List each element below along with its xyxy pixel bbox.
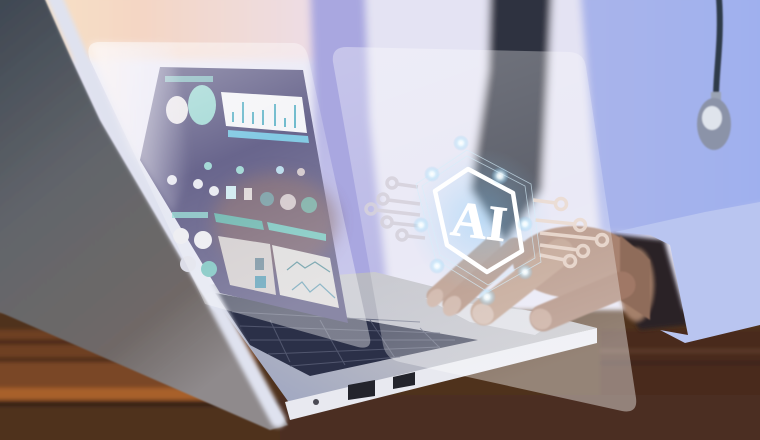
wooden table bbox=[0, 310, 760, 440]
laptop base bbox=[205, 272, 597, 420]
laptop lid back bbox=[0, 0, 288, 430]
right glass panel bbox=[333, 47, 636, 411]
front edge with ports bbox=[285, 328, 597, 420]
AI label: AI bbox=[448, 190, 510, 252]
circuit traces right bbox=[533, 198, 608, 266]
AI hologram icon bbox=[366, 135, 608, 306]
cuff bbox=[615, 202, 760, 343]
laptop screen dashboard bbox=[140, 67, 348, 323]
hand reflection on screen bbox=[213, 174, 337, 270]
glowing nodes bbox=[413, 135, 533, 306]
blurred background: office and doctor's coat bbox=[0, 0, 760, 350]
concentric hexagon lines bbox=[416, 150, 541, 292]
chart: lower panels bbox=[214, 213, 339, 308]
stethoscope bbox=[697, 0, 731, 150]
left glass panel bbox=[88, 42, 370, 348]
dashboard: donut charts bbox=[165, 76, 317, 277]
doctor's sleeve and cuff bbox=[612, 202, 760, 343]
circuit traces left bbox=[366, 178, 425, 240]
lid rim bbox=[54, 0, 278, 420]
keyboard bbox=[215, 293, 478, 376]
trackpad bbox=[425, 298, 565, 335]
wrist in shadow bbox=[612, 234, 688, 330]
hand on trackpad bbox=[424, 226, 650, 334]
chart: top bar chart bbox=[221, 92, 307, 133]
hexagon bbox=[435, 169, 522, 272]
